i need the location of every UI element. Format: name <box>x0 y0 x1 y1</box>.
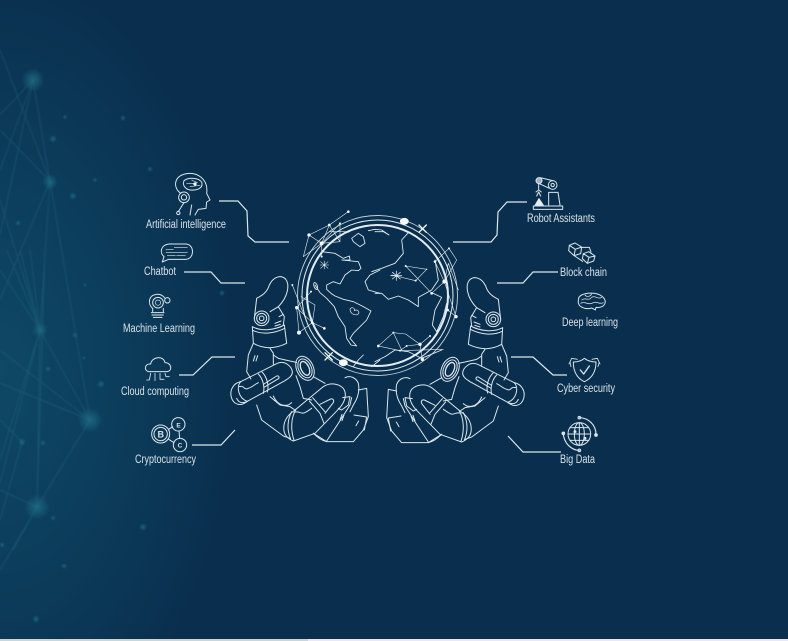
label: Cyber security: Cyber security <box>557 383 615 395</box>
label: Machine Learning: Machine Learning <box>123 323 195 335</box>
left icons <box>145 173 210 452</box>
globe rings <box>298 216 458 376</box>
icon: robot arm <box>533 178 563 209</box>
nodes west <box>291 210 350 335</box>
icon letters: cryptocurrency <box>157 422 183 450</box>
label: Robot Assistants: Robot Assistants <box>527 213 595 225</box>
label: Deep learning: Deep learning <box>562 317 618 329</box>
eurasia coast <box>372 233 438 307</box>
nodes east <box>377 247 458 361</box>
sparkle east <box>391 271 402 280</box>
amazon squiggle <box>350 308 359 315</box>
icon: cloud <box>145 358 171 381</box>
east flare <box>400 218 426 232</box>
icon: brain <box>578 293 605 310</box>
left robot hand <box>231 277 368 442</box>
label: Artificial intelligence: Artificial intelligence <box>146 219 226 231</box>
icon: blockchain cubes <box>569 243 595 263</box>
bottom edge strip <box>0 639 788 641</box>
network east <box>392 248 458 317</box>
eastern globe half <box>368 218 458 362</box>
globe <box>291 210 458 376</box>
network top left <box>303 212 348 257</box>
americas <box>315 252 371 346</box>
network south <box>378 333 443 359</box>
left leader lines <box>179 201 289 445</box>
greenland <box>352 233 365 247</box>
label: Block chain: Block chain <box>560 267 607 279</box>
icon: cryptocurrency nodes <box>152 418 187 452</box>
west flare <box>325 353 347 366</box>
sparkle west <box>320 261 329 269</box>
icon: chat bubble <box>161 244 192 262</box>
right icons <box>533 178 605 452</box>
right leader lines <box>453 202 567 452</box>
label: Chatbot: Chatbot <box>144 266 177 278</box>
arctic islands <box>368 229 389 235</box>
icon letters: cryptocurrency: E <box>176 422 181 430</box>
icon: AI head <box>176 173 210 215</box>
label: Cloud computing: Cloud computing <box>121 386 189 398</box>
east coast <box>432 293 447 332</box>
icon letters: cryptocurrency: C <box>178 442 183 450</box>
southern coast <box>375 350 442 362</box>
label: Big Data: Big Data <box>560 454 595 466</box>
icon: shield <box>569 358 600 382</box>
right robot hand <box>387 278 524 443</box>
labels <box>121 213 618 466</box>
decorative network on left edge <box>0 50 225 623</box>
isthmus detail <box>313 282 318 290</box>
icon: big data globe <box>562 416 597 452</box>
label: Cryptocurrency: Cryptocurrency <box>135 454 196 466</box>
southern islands <box>353 355 380 367</box>
network left <box>292 285 324 333</box>
western globe half <box>291 210 380 367</box>
eurasia west coast <box>365 270 380 293</box>
icon: machine learning bulb <box>149 294 170 317</box>
icon letters: cryptocurrency: B <box>157 430 164 440</box>
